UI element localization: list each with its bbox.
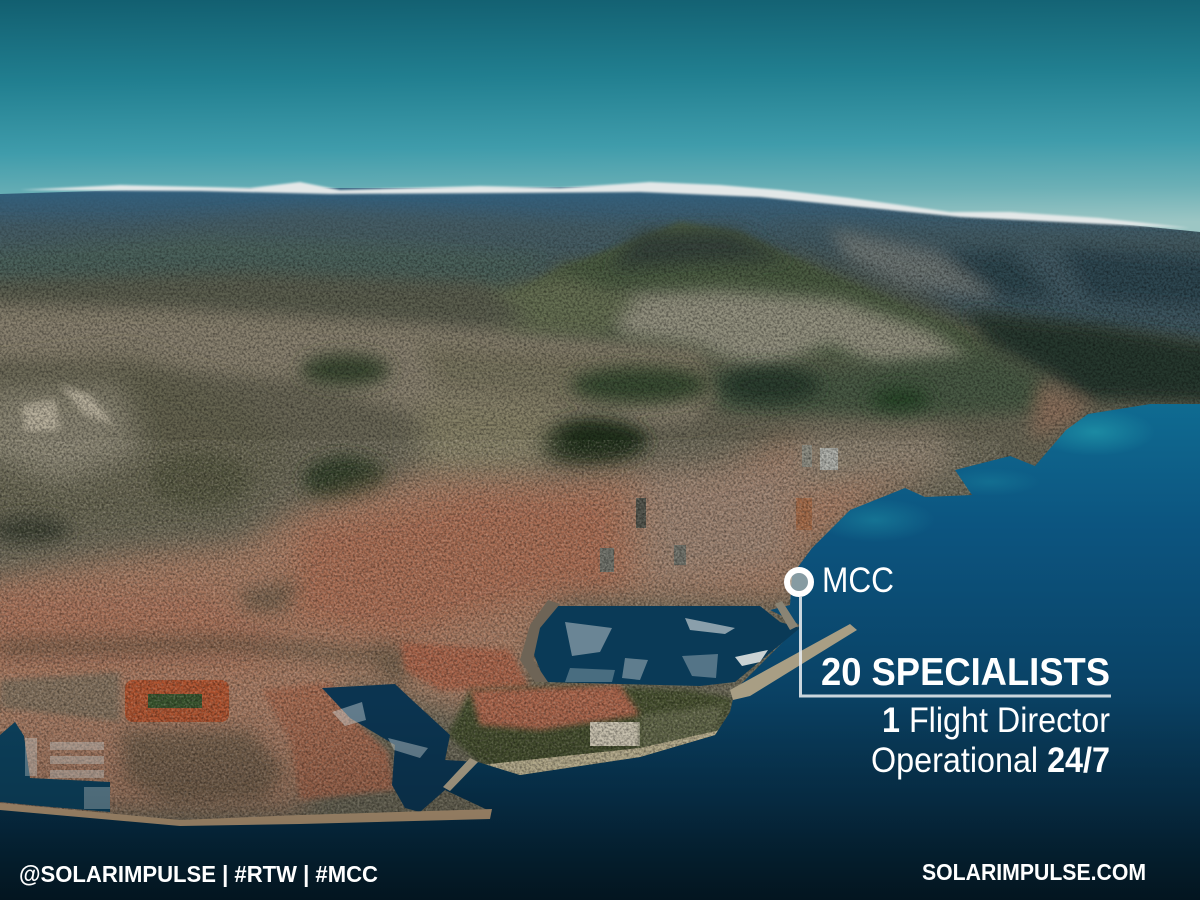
west marina boats <box>25 738 110 809</box>
Monaco rock <box>448 685 732 776</box>
footer hashtags: @SOLARIMPULSE | #RTW | #MCC <box>19 861 378 887</box>
sky <box>0 0 1200 235</box>
small jetty <box>775 601 798 630</box>
leader line <box>800 597 1111 696</box>
stadium <box>125 680 229 722</box>
flight director line: 1 Flight Director <box>882 701 1110 740</box>
sea <box>0 400 1200 900</box>
harbour wall <box>0 803 492 826</box>
dark streets and gardens of the lower town <box>0 580 420 802</box>
towers <box>600 445 838 572</box>
Fontvieille jetty <box>443 758 478 791</box>
central peak <box>554 220 970 346</box>
Port Hercule quay <box>520 600 560 682</box>
turquoise shallows <box>815 408 1155 542</box>
mid-distance hills and villages <box>0 272 720 440</box>
mountain range <box>0 214 1200 364</box>
main breakwater <box>730 624 857 700</box>
MCC location marker <box>787 561 894 600</box>
left limestone hillside <box>0 351 260 504</box>
old buildings <box>0 672 120 722</box>
texture overlay on land <box>0 190 1200 840</box>
Port Hercule basin <box>530 606 800 686</box>
Fontvieille boats <box>332 702 428 758</box>
specialists callout <box>821 651 1110 780</box>
green patches <box>0 354 930 544</box>
Fontvieille port <box>322 684 478 812</box>
far blue mountains <box>0 186 1200 326</box>
west marina <box>0 722 110 812</box>
land base <box>0 320 1200 835</box>
snow line <box>20 182 1190 228</box>
bottom sea shading <box>0 700 1200 900</box>
limestone cliffs <box>22 385 115 432</box>
town: rooftops <box>0 400 960 810</box>
footer website: SOLARIMPULSE.COM <box>922 859 1146 885</box>
specialists heading: 20 SPECIALISTS <box>821 651 1110 694</box>
moored boats <box>565 618 768 682</box>
operational line: Operational 24/7 <box>871 741 1110 780</box>
Fontvieille apartments <box>262 682 395 800</box>
right dark ridge <box>700 312 1200 440</box>
marker ring <box>787 570 811 594</box>
MCC label: MCC <box>822 561 894 600</box>
